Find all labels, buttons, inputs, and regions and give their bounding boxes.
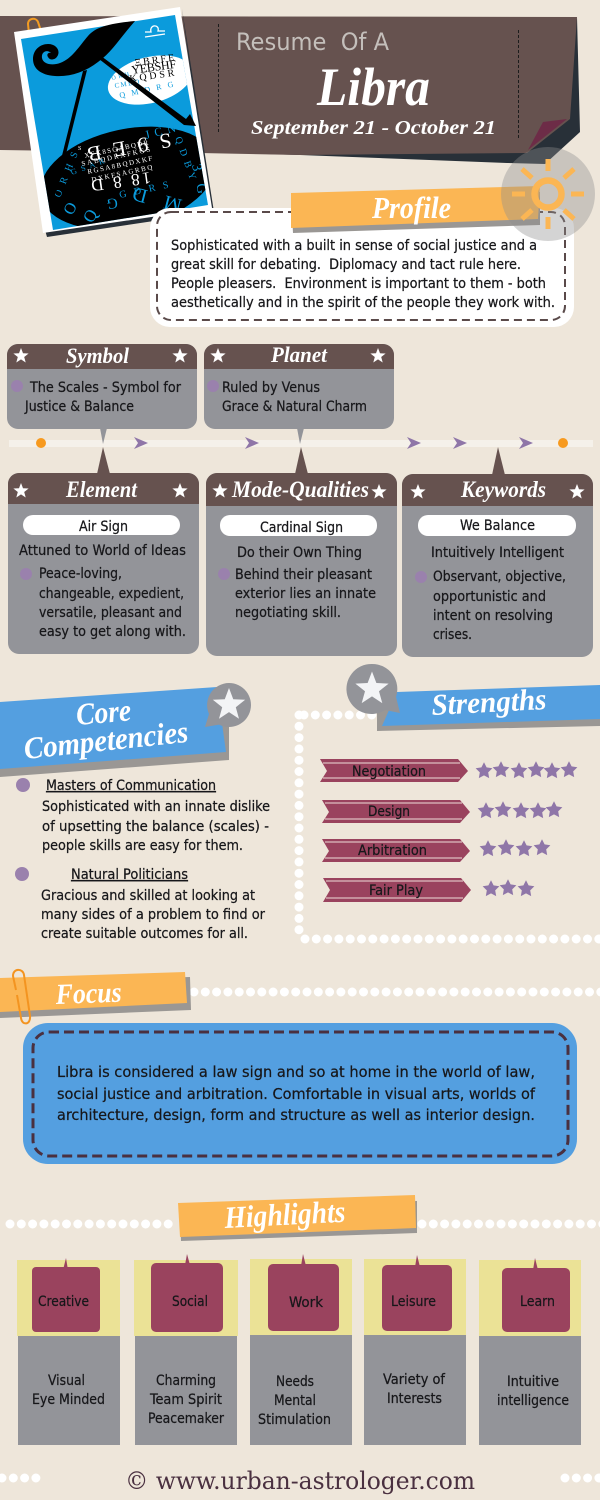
highlights banner bbox=[178, 1194, 417, 1241]
poster: libra illustration: O R H S bbox=[53, 150, 81, 199]
profile text: great skill for debating. Diplomacy and tact rule here. bbox=[171, 257, 521, 273]
card: work: Mental bbox=[274, 1393, 316, 1409]
competency: natural politicians: Gracious and skilled at looking at bbox=[41, 888, 255, 904]
panel: element bbox=[8, 447, 199, 654]
card: creative: Creative bbox=[38, 1294, 89, 1310]
symbol text: Justice & Balance bbox=[24, 399, 134, 415]
timeline bbox=[9, 437, 593, 449]
strength: design: Design bbox=[368, 804, 410, 820]
element text: easy to get along with. bbox=[39, 624, 186, 640]
card: learn: Intuitive bbox=[507, 1374, 559, 1390]
focus box: architecture, design, form and structure as well as interior design. bbox=[57, 1106, 535, 1124]
symbol heading: Symbol bbox=[66, 343, 130, 368]
poster: libra illustration: ΞBRFE bbox=[134, 53, 175, 69]
card: learn: Learn bbox=[520, 1294, 555, 1310]
strength: fair play bbox=[323, 878, 534, 902]
header text: dates: September 21 - October 21 bbox=[251, 117, 496, 139]
poster: libra illustration: G S A R bbox=[70, 156, 106, 177]
poster: libra illustration: S 9 E B bbox=[85, 128, 173, 166]
competency: natural politicians: many sides of a problem to find or bbox=[41, 907, 266, 923]
core competencies banner: Core bbox=[75, 692, 133, 732]
panel: mode-qualities bbox=[206, 447, 397, 656]
poster: libra illustration: S bbox=[78, 146, 81, 152]
panel: symbol bbox=[7, 343, 197, 444]
element heading: Element bbox=[65, 477, 138, 502]
card: social: Team Spirit bbox=[149, 1392, 222, 1408]
poster: libra illustration: DXKFSAGRBQ bbox=[91, 163, 153, 184]
profile banner: Profile bbox=[371, 190, 451, 225]
icon: sun bbox=[501, 147, 595, 241]
strength: fair play: Fair Play bbox=[369, 883, 424, 899]
focus box: social justice and arbitration. Comfortable in visual arts, worlds of bbox=[57, 1085, 536, 1103]
poster: libra illustration: CMDQ bbox=[114, 78, 140, 90]
element text: versatile, pleasant and bbox=[39, 605, 182, 621]
poster: libra illustration: J C N Q bbox=[143, 117, 191, 142]
profile text bbox=[171, 238, 555, 311]
competency: masters of communication: Masters of Communication bbox=[46, 778, 216, 794]
mode pill bbox=[220, 515, 377, 536]
element text: changeable, expedient, bbox=[39, 586, 184, 602]
card: social: Peacemaker bbox=[148, 1411, 225, 1427]
keywords pill bbox=[418, 515, 576, 536]
planet text bbox=[222, 380, 367, 415]
card: leisure: Interests bbox=[387, 1391, 442, 1407]
strength: negotiation bbox=[320, 759, 577, 782]
card: social bbox=[134, 1254, 238, 1445]
planet text: Grace & Natural Charm bbox=[222, 399, 367, 415]
highlights banner: Highlights bbox=[223, 1194, 346, 1235]
competency: natural politicians bbox=[15, 867, 266, 942]
panel: profile bbox=[150, 147, 595, 327]
element pill: Air Sign bbox=[79, 519, 128, 535]
card: learn: intelligence bbox=[497, 1393, 569, 1409]
focus banner bbox=[0, 972, 191, 1018]
competency: masters of communication: Sophisticated with an innate dislike bbox=[42, 799, 270, 815]
profile text: aesthetically and in the spirit of the people they work with. bbox=[171, 295, 555, 311]
strengths banner bbox=[377, 683, 600, 731]
competency: natural politicians: create suitable outcomes for all. bbox=[41, 926, 248, 942]
keywords text: Observant, objective, bbox=[433, 569, 566, 585]
strength: design bbox=[322, 800, 562, 823]
keywords text: Intuitively Intelligent bbox=[431, 545, 564, 561]
card: social: Social bbox=[172, 1294, 208, 1310]
strength: arbitration: Arbitration bbox=[358, 843, 427, 859]
panel: keywords bbox=[402, 447, 593, 657]
poster: libra illustration: Q M D R G bbox=[119, 80, 174, 100]
profile text: Sophisticated with a built in sense of social justice and a bbox=[171, 238, 537, 254]
card: learn bbox=[479, 1258, 581, 1445]
panel: highlights bbox=[10, 1194, 600, 1445]
element text: Peace-loving, bbox=[39, 566, 122, 582]
core competencies banner bbox=[0, 687, 229, 777]
header text: Libra: Libra bbox=[316, 57, 430, 117]
card: leisure bbox=[364, 1255, 466, 1445]
keywords heading: Keywords bbox=[460, 477, 546, 502]
element text bbox=[19, 543, 186, 640]
panel: strengths bbox=[299, 664, 600, 939]
focus box: Libra is considered a law sign and so at home in the world of law, bbox=[57, 1063, 535, 1081]
planet text: Ruled by Venus bbox=[222, 380, 320, 396]
poster: libra illustration: 3 G bbox=[188, 163, 209, 195]
strength: arbitration bbox=[322, 839, 550, 862]
poster: libra illustration: 18 8 D bbox=[90, 168, 152, 195]
poster: libra illustration: ORH bbox=[111, 72, 131, 82]
poster: libra illustration: G bbox=[106, 194, 119, 211]
copyright text: © www.urban-astrologer.com bbox=[125, 1467, 475, 1495]
panel: focus bbox=[0, 970, 600, 1164]
icon: star bubble bbox=[346, 664, 400, 714]
strength: negotiation: Negotiation bbox=[352, 764, 426, 780]
symbol text bbox=[24, 380, 182, 415]
profile banner bbox=[291, 186, 540, 233]
card: creative: Visual bbox=[48, 1373, 85, 1389]
mode pill: Cardinal Sign bbox=[260, 520, 343, 536]
planet heading: Planet bbox=[270, 342, 328, 367]
competency: masters of communication bbox=[16, 778, 270, 854]
core competencies banner: Competencies bbox=[22, 714, 190, 766]
poster: libra illustration: M D bbox=[130, 182, 184, 216]
poster: libra illustration bbox=[14, 7, 225, 244]
header ribbon bbox=[0, 16, 580, 164]
poster: libra illustration: RGSA8BQDXKF bbox=[87, 154, 153, 176]
card: leisure: Leisure bbox=[391, 1294, 436, 1310]
mode text: Behind their pleasant bbox=[235, 567, 372, 583]
keywords text: crises. bbox=[433, 627, 472, 643]
poster: libra illustration: O bbox=[61, 200, 81, 218]
symbol text: The Scales - Symbol for bbox=[29, 380, 182, 396]
card: creative bbox=[17, 1258, 120, 1445]
card: leisure: Variety of bbox=[383, 1372, 446, 1388]
card: work: Needs bbox=[276, 1374, 314, 1390]
panel: core competencies bbox=[0, 683, 270, 942]
competency: masters of communication: people skills are easy for them. bbox=[42, 838, 243, 854]
competency: natural politicians: Natural Politicians bbox=[71, 867, 188, 883]
poster: libra illustration: SABQDRXFKGS bbox=[81, 146, 151, 168]
poster: libra illustration: YEBSHF bbox=[130, 57, 177, 77]
mode-qualities heading: Mode-Qualities bbox=[231, 477, 369, 502]
icon: star bubble bbox=[205, 683, 251, 727]
keywords pill: We Balance bbox=[460, 518, 535, 534]
keywords text bbox=[431, 545, 566, 643]
poster: libra illustration: Q bbox=[79, 206, 102, 226]
icon: paperclip bbox=[13, 970, 30, 1023]
competency: masters of communication: of upsetting the balance (scales) - bbox=[42, 819, 269, 835]
panel: planet bbox=[204, 342, 394, 444]
card: social: Charming bbox=[156, 1373, 216, 1389]
header text: resume of a: Resume Of A bbox=[236, 28, 389, 56]
mode text: negotiating skill. bbox=[235, 605, 341, 621]
poster: libra illustration: KQDSR bbox=[129, 68, 175, 85]
keywords text: intent on resolving bbox=[433, 608, 553, 624]
poster: libra illustration: Q D B Y bbox=[172, 135, 198, 181]
element text: Attuned to World of Ideas bbox=[19, 543, 186, 559]
keywords text: opportunistic and bbox=[433, 589, 546, 605]
card: work: Stimulation bbox=[258, 1412, 331, 1428]
card: work: Work bbox=[289, 1295, 324, 1311]
mode text: exterior lies an innate bbox=[235, 586, 376, 602]
card: work bbox=[250, 1254, 352, 1445]
focus box bbox=[23, 1023, 577, 1164]
profile text: People pleasers. Environment is important to them - both bbox=[171, 276, 546, 292]
card: creative: Eye Minded bbox=[32, 1392, 105, 1408]
poster: libra illustration: G D R S bbox=[118, 180, 170, 201]
strengths banner: Strengths bbox=[431, 683, 547, 722]
focus banner: Focus bbox=[54, 977, 122, 1011]
mode text bbox=[235, 545, 376, 621]
mode text: Do their Own Thing bbox=[237, 545, 362, 561]
element pill bbox=[23, 515, 180, 535]
poster: libra illustration: XFK8SGABQDR bbox=[84, 139, 149, 160]
